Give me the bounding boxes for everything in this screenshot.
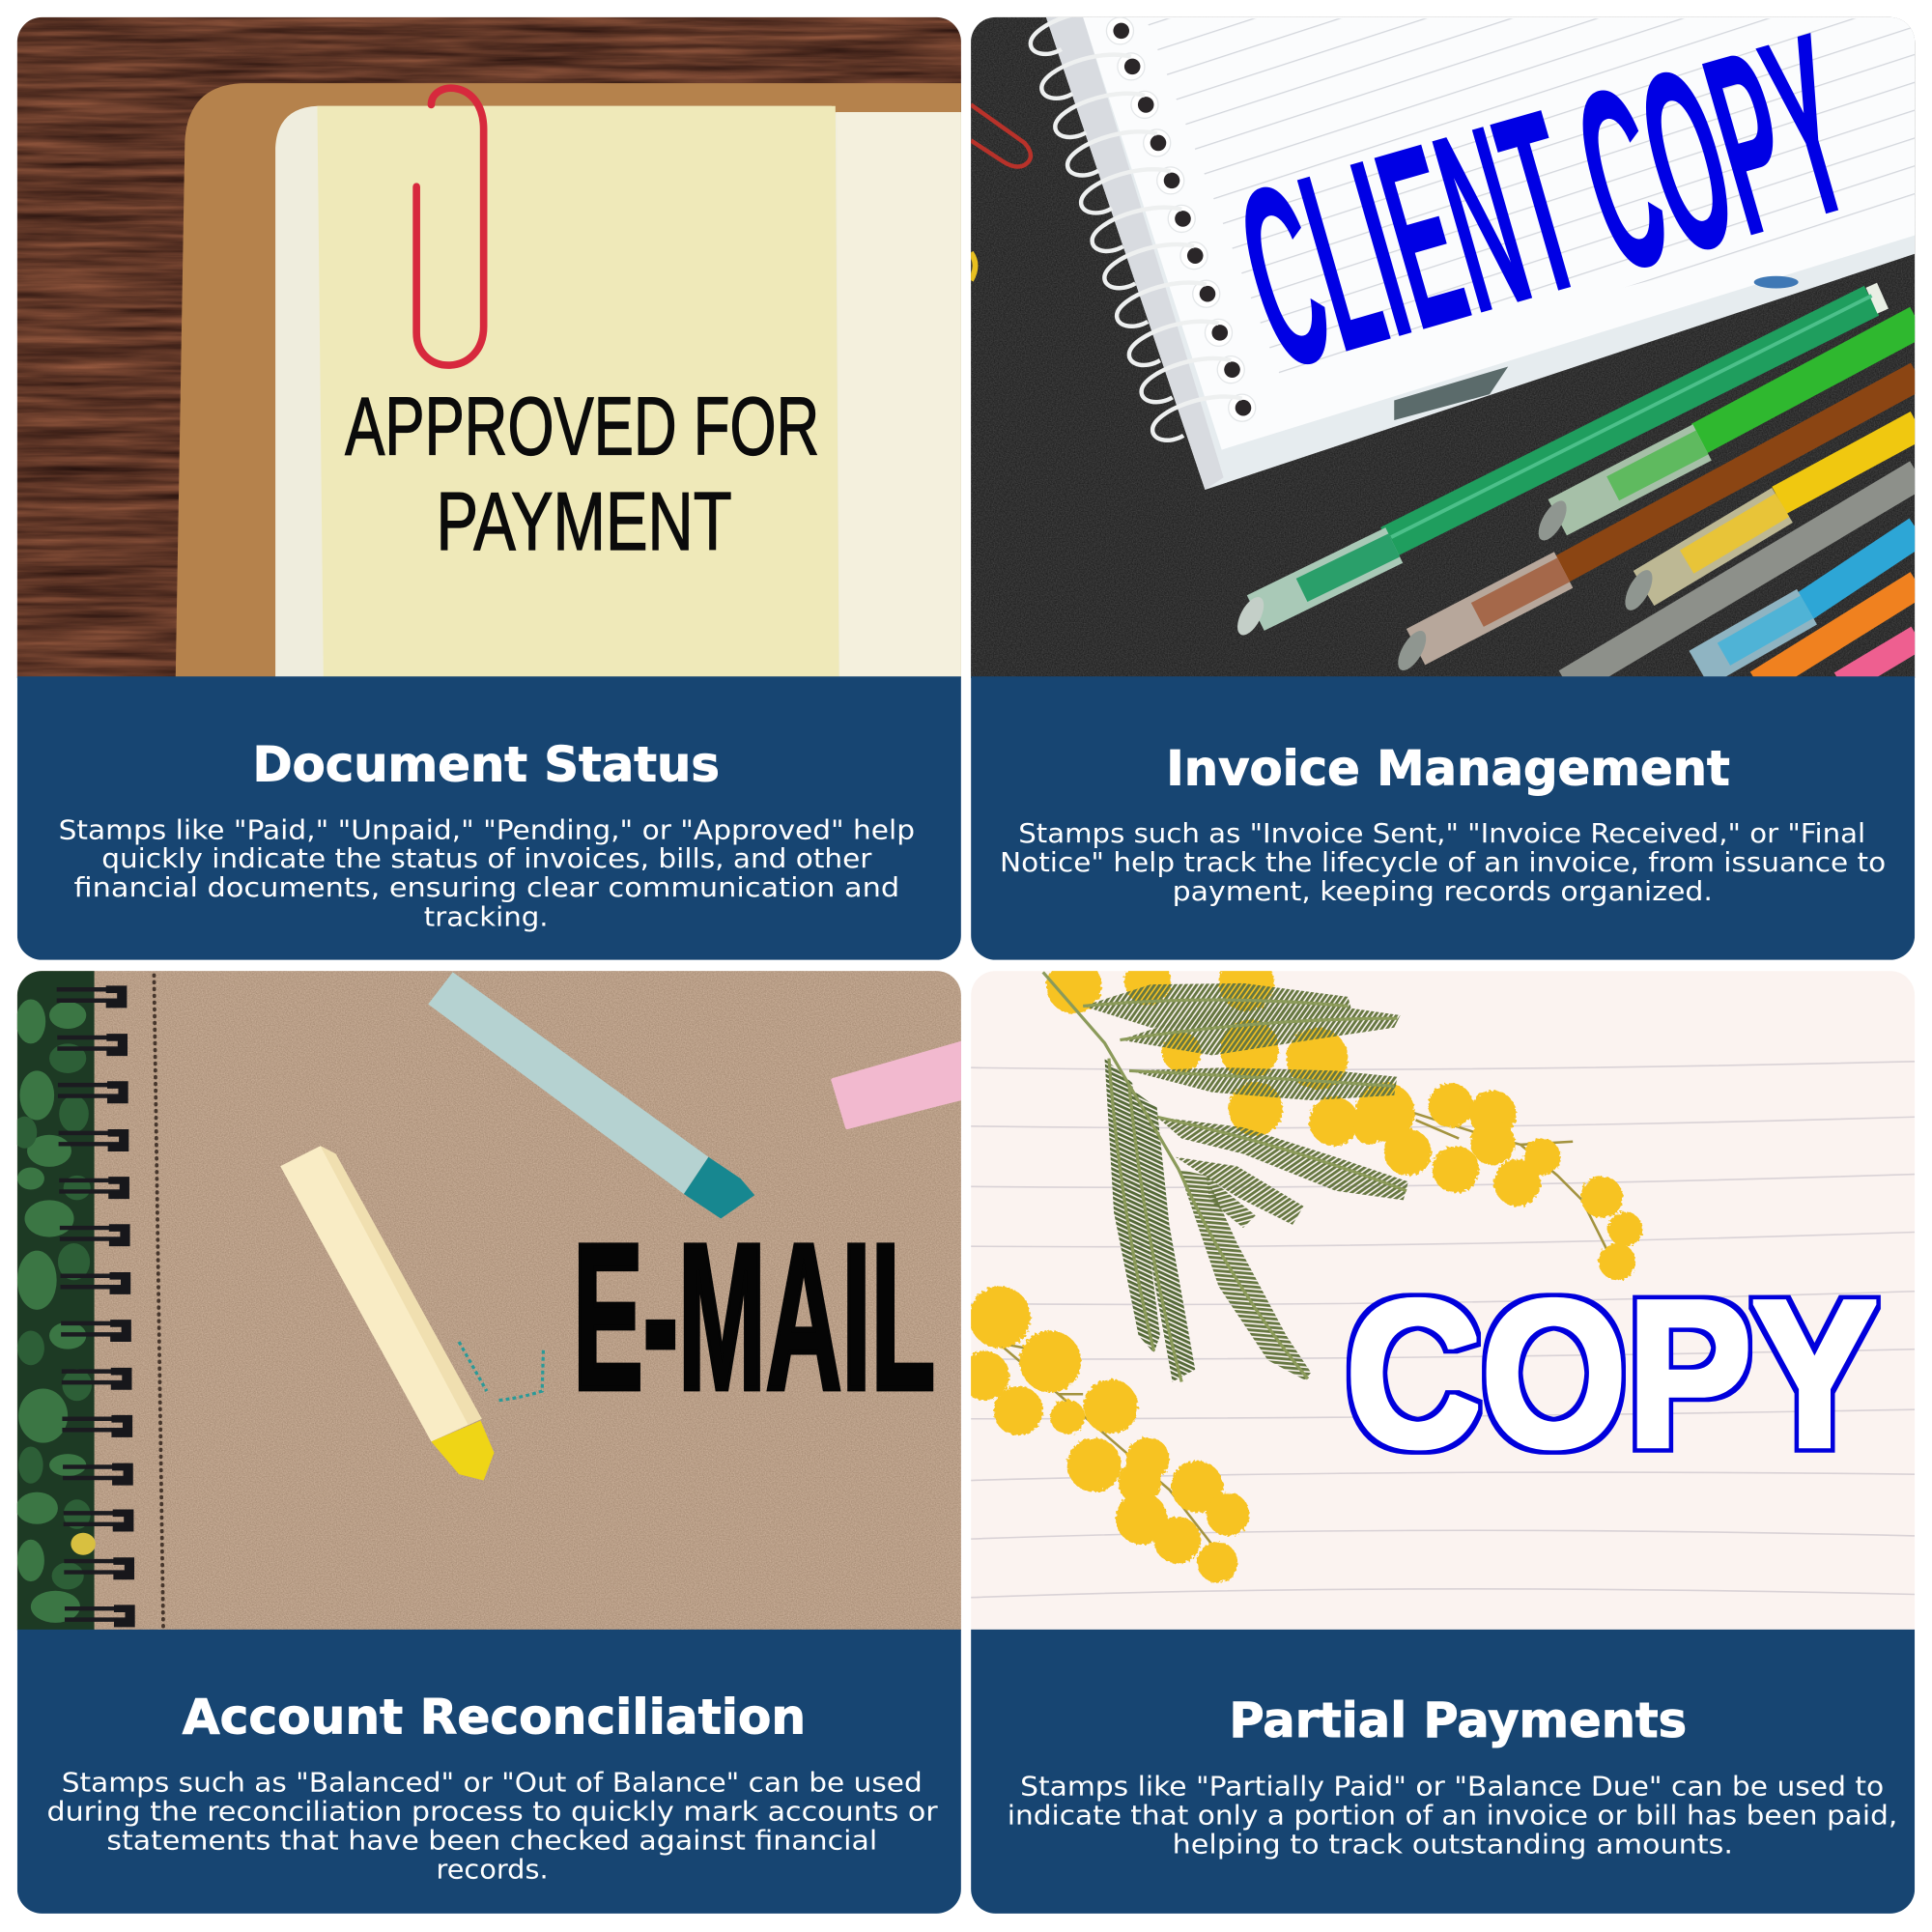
text panel: [17, 676, 961, 961]
pens: [1232, 296, 1918, 684]
stamp text: approved for payment: [344, 396, 817, 551]
description: indicate that only a portion of an invoice or bill has been paid,: [1008, 1801, 1897, 1831]
description: Stamps such as "Balanced" or "Out of Balance" can be used: [62, 1769, 923, 1799]
description: financial documents, ensuring clear communication and: [74, 873, 899, 903]
panel: invoice management: [966, 0, 1918, 961]
text panel: [17, 1630, 961, 1915]
description: [59, 816, 915, 933]
stamp text: copy outline: COPY: [1346, 1257, 1877, 1491]
description: [1008, 1772, 1897, 1860]
description: Stamps such as "Invoice Sent," "Invoice Received," or "Final: [1018, 819, 1865, 849]
fern fronds: [1083, 983, 1408, 1381]
description: quickly indicate the status of invoices, bills, and other: [101, 844, 872, 874]
description: tracking.: [424, 903, 549, 933]
panel: account reconciliation: [13, 971, 961, 1915]
stamp text: approved for payment: PAYMENT: [437, 476, 732, 568]
text panel: [971, 676, 1915, 961]
heading: Invoice Management: [1166, 741, 1730, 797]
description: payment, keeping records organized.: [1173, 877, 1713, 907]
photo: mimosa on lined paper: [960, 955, 1915, 1631]
blossoms: [960, 955, 1642, 1582]
photo: paper clip on note over wood: [17, 17, 961, 678]
description: [46, 1769, 938, 1886]
text panel: [971, 1630, 1915, 1915]
description: [1000, 819, 1886, 907]
description: Stamps like "Paid," "Unpaid," "Pending," or "Approved" help: [59, 816, 915, 846]
stamp text: approved for payment: APPROVED FOR: [345, 382, 819, 473]
photo: kraft notebook with chalk: [13, 971, 961, 1631]
heading: Document Status: [252, 737, 720, 793]
panel: partial payments: [960, 955, 1915, 1915]
heading: Account Reconciliation: [183, 1690, 806, 1746]
heading: Partial Payments: [1229, 1692, 1687, 1748]
photo: notebook and pens on dark surface: [966, 0, 1918, 684]
description: statements that have been checked against financial: [106, 1827, 877, 1857]
description: Notice" help track the lifecycle of an invoice, from issuance to: [1000, 848, 1886, 878]
panel: document status: [17, 17, 961, 961]
description: Stamps like "Partially Paid" or "Balance Due" can be used to: [1020, 1772, 1884, 1802]
stamp text: e-mail: E-MAIL: [573, 1201, 935, 1434]
description: helping to track outstanding amounts.: [1173, 1830, 1733, 1860]
description: during the reconciliation process to quickly mark accounts or: [46, 1798, 938, 1828]
description: records.: [437, 1856, 549, 1886]
